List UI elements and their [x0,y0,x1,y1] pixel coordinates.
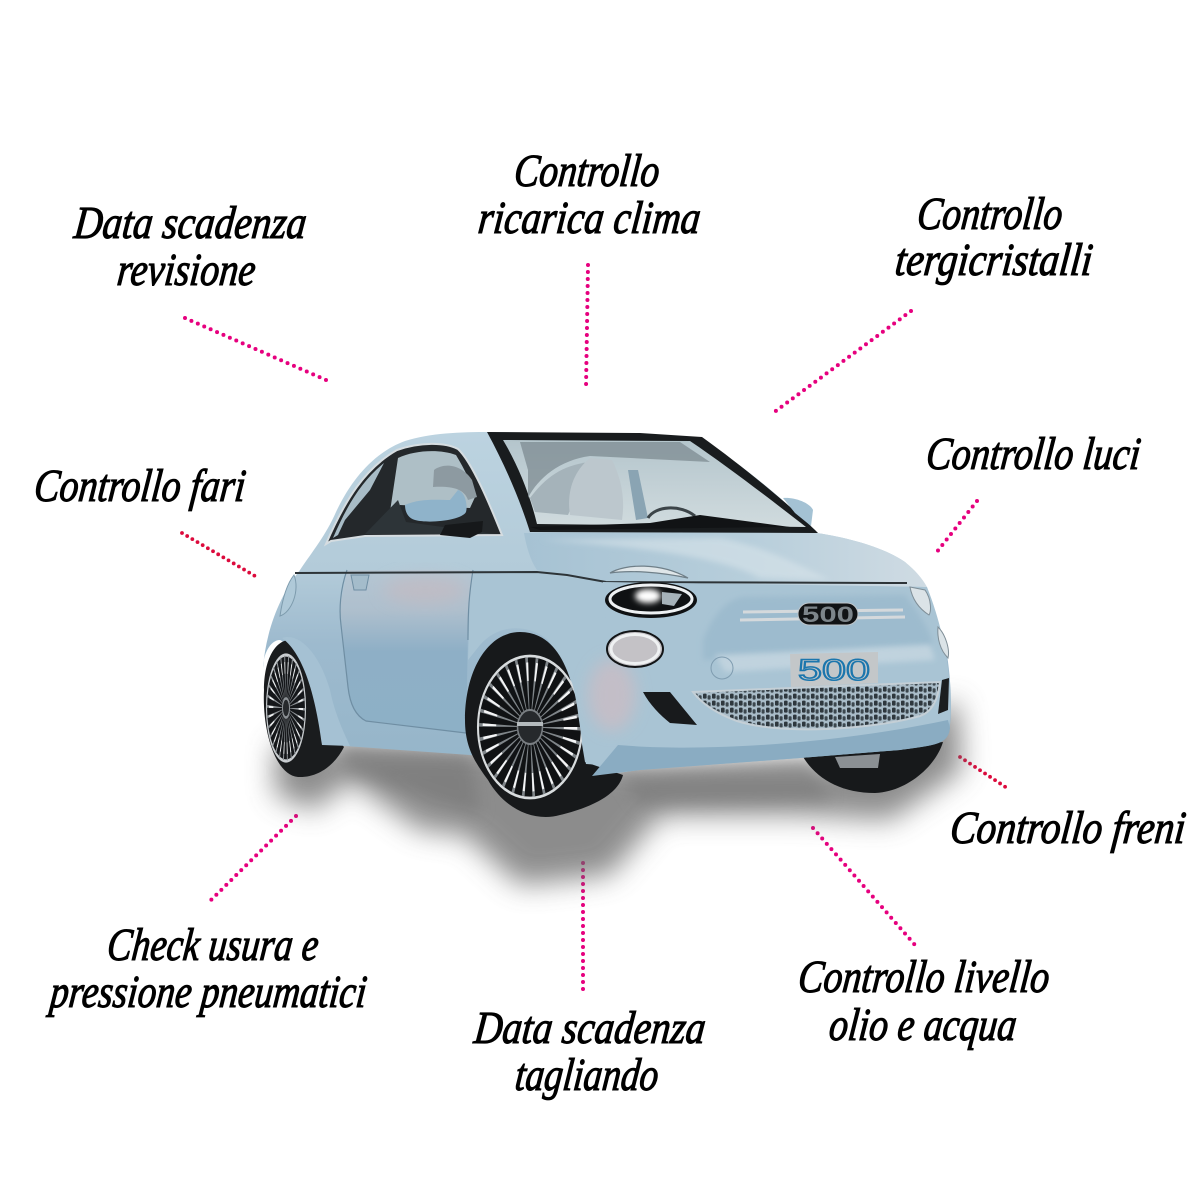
seat seen through glass [433,466,477,500]
dotted leader: controllo freni [960,757,1010,790]
ground shadow [275,700,962,885]
label: controllo luci: Controllo luci [924,428,1143,479]
right vent [938,678,949,714]
label: check usura e pressione pneumatici: Check usura e [105,919,321,970]
rear rim [266,655,306,761]
front wing overlay [548,615,660,768]
centre seat [569,458,623,520]
number plate: 500 [798,654,870,687]
lower bumper [592,720,950,776]
windshield frame [487,432,818,533]
bonnet [524,533,927,587]
side mirror [405,490,483,538]
label: controllo ricarica clima: ricarica clima [476,192,703,243]
label: data scadenza tagliando: Data scadenza [471,1002,708,1053]
interior top shade [520,442,710,498]
number plate [790,652,878,687]
grille [693,682,940,729]
front wheel [465,632,623,817]
label: controllo livello olio e acqua [796,951,1052,1050]
oval lamp chrome ring [611,634,659,664]
hub logo [517,722,543,726]
label: data scadenza tagliando [471,1002,708,1100]
bonnet highlights [540,538,830,580]
front rim [478,656,582,798]
rear wheel [264,640,344,777]
door outline [340,570,473,733]
500 badge: 500 [802,602,854,627]
side marker lamps [910,587,949,658]
headlight eyebrow [610,566,688,578]
front tyre [465,632,623,817]
chrome belt line [295,572,907,583]
left seat [530,462,590,515]
fascia recess [703,595,932,660]
500 badge [798,602,858,627]
oval indicator lamp [607,631,663,667]
dotted leader: controllo tergicristalli [773,311,911,413]
side windows [326,444,502,544]
dotted leader: controllo ricarica clima [586,265,588,388]
pearl reflection [588,659,636,731]
label: controllo tergicristalli: tergicristalli [893,234,1095,285]
door panel [340,570,473,733]
front wing [468,570,650,776]
label: controllo ricarica clima [476,145,703,243]
dotted leader: data scadenza revisione [185,318,326,380]
label: check usura e pressione pneumatici: pressione pneumatici [46,966,369,1017]
dotted leader: controllo livello olio e acqua [813,828,915,945]
label: data scadenza revisione [71,197,309,295]
badge chrome bars [740,610,905,620]
windshield glass [503,440,806,527]
lower window darkness [365,500,495,534]
window frame [326,444,502,544]
door handle [351,575,369,590]
car interior [520,442,790,530]
front fascia [603,582,951,768]
label: controllo livello olio e acqua: Controllo livello [796,951,1052,1002]
fascia highlight [715,645,935,672]
headlight [605,582,697,618]
label: data scadenza revisione: revisione [115,244,258,295]
wipers [530,515,790,530]
label: controllo fari: Controllo fari [32,460,248,511]
label: data scadenza revisione: Data scadenza [71,197,309,248]
front side glass [388,451,476,525]
car body shell [263,432,951,775]
steering wheel [648,508,695,518]
far mirror [783,498,813,526]
label: check usura e pressione pneumatici [46,919,369,1017]
sensor circle [711,657,733,679]
label: controllo livello olio e acqua: olio e acqua [827,999,1019,1050]
door colour sheen [383,576,467,604]
label: data scadenza tagliando: tagliando [513,1049,661,1100]
label: controllo ricarica clima: Controllo [512,145,662,196]
far wheel spokes [835,754,880,768]
label: controllo tergicristalli: Controllo [915,188,1065,239]
rear lamp [280,575,296,616]
rear quarter glass [333,463,384,538]
rear side shading [282,637,350,746]
pillar [628,470,648,520]
dotted leader: controllo luci [936,501,977,553]
dotted leader: check usura e pressione pneumatici [208,816,296,903]
fog lamp vent [643,692,697,725]
label: controllo tergicristalli [893,188,1095,285]
rear tyre [264,640,344,777]
car illustration [263,432,962,885]
dotted leader: data scadenza tagliando [581,863,585,992]
dotted leader: controllo fari [182,533,255,576]
far front tyre [802,742,943,793]
